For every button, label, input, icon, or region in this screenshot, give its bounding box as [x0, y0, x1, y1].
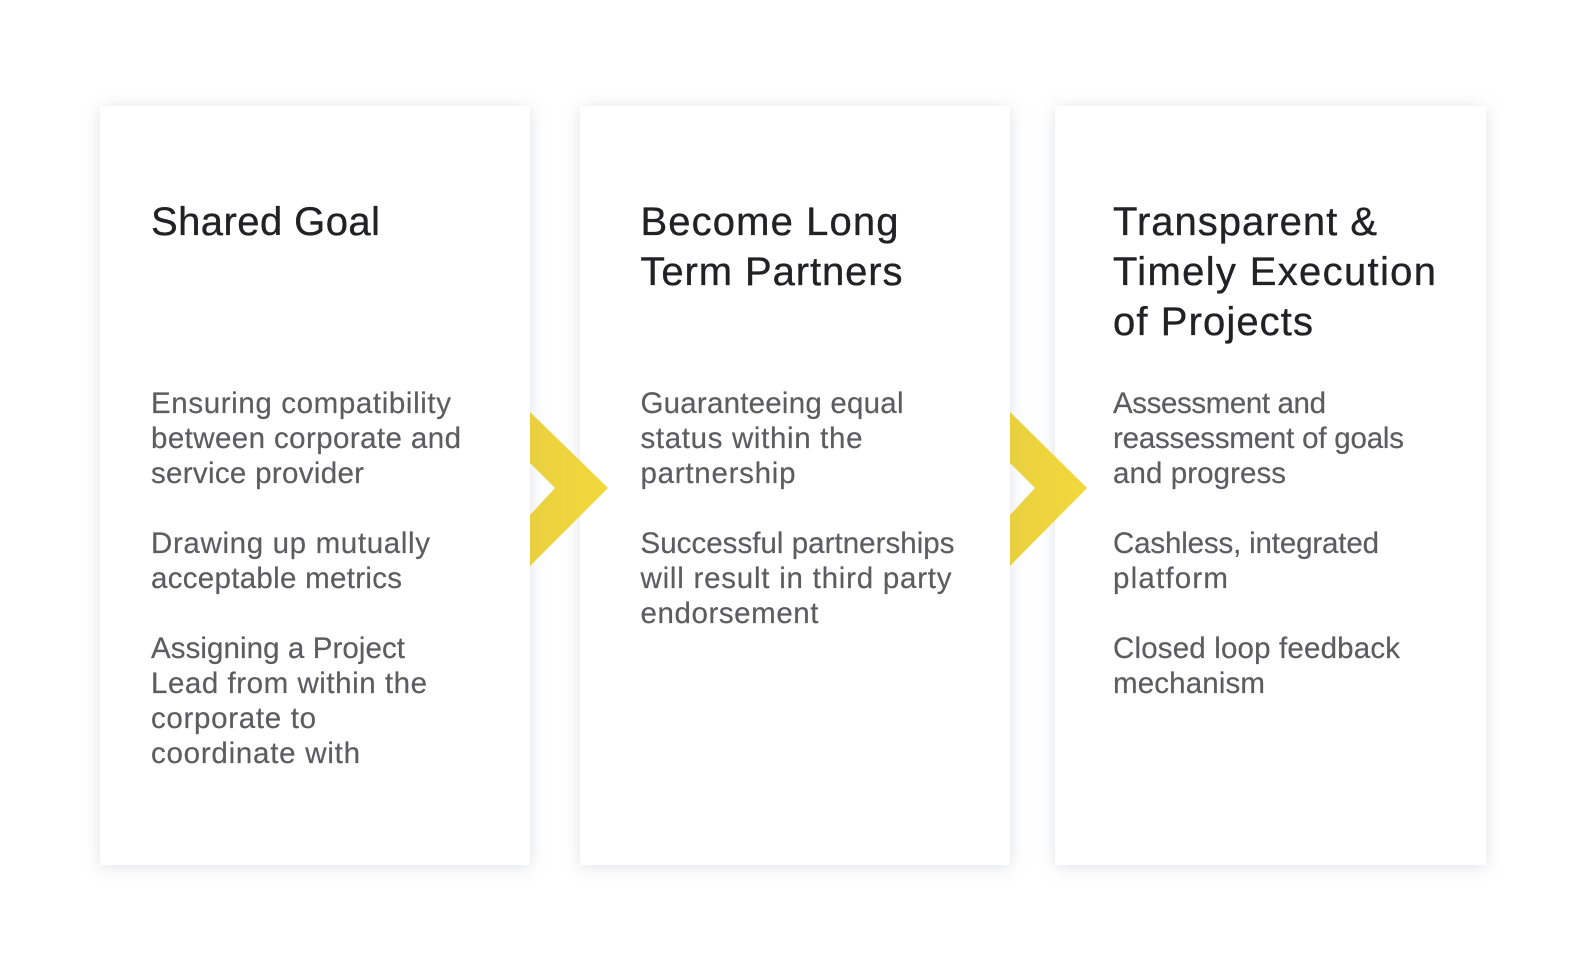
text block: shared goal points: Ensuring compatibility: [151, 387, 451, 420]
text block: execution points: mechanism: [1113, 667, 1265, 700]
heading: become long term partners: Become Long: [640, 200, 898, 244]
text block: execution points: Closed loop feedback: [1113, 632, 1400, 665]
arrow: second chevron: [1010, 412, 1087, 566]
heading: become long term partners: [640, 200, 902, 294]
text block: shared goal points: Drawing up mutually: [151, 527, 430, 560]
text block: shared goal points: acceptable metrics: [151, 562, 402, 595]
text block: execution points: platform: [1113, 562, 1228, 595]
panel: shared goal: [100, 106, 530, 865]
text block: execution points: [1113, 387, 1404, 700]
arrow: first chevron: [530, 412, 608, 566]
text block: partnership points: status within the: [640, 422, 862, 455]
heading: shared goal: Shared Goal: [151, 200, 380, 244]
text block: shared goal points: Lead from within the: [151, 667, 427, 700]
text block: partnership points: endorsement: [640, 597, 818, 630]
text block: execution points: Assessment and: [1113, 387, 1326, 420]
text block: shared goal points: Assigning a Project: [151, 632, 405, 665]
text block: execution points: Cashless, integrated: [1113, 527, 1379, 560]
text block: shared goal points: coordinate with: [151, 737, 360, 770]
text block: shared goal points: between corporate and: [151, 422, 461, 455]
text block: execution points: and progress: [1113, 457, 1286, 490]
text block: partnership points: Successful partnerships: [640, 527, 954, 560]
card background: [1055, 106, 1486, 865]
heading: become long term partners: Term Partners: [640, 250, 902, 294]
card background: [580, 106, 1010, 865]
heading: transparent and timely execution of projects: [1113, 200, 1436, 344]
text block: execution points: reassessment of goals: [1113, 422, 1404, 455]
panel: long term partners: [580, 106, 1010, 865]
text block: partnership points: partnership: [640, 457, 796, 490]
card background: [100, 106, 530, 865]
heading: transparent and timely execution of projects: Transparent &: [1113, 200, 1377, 244]
text block: shared goal points: [151, 387, 461, 770]
text block: shared goal points: corporate to: [151, 702, 316, 735]
text block: partnership points: will result in third party: [640, 562, 952, 595]
heading: transparent and timely execution of projects: of Projects: [1113, 300, 1313, 344]
heading: transparent and timely execution of projects: Timely Execution: [1113, 250, 1436, 294]
text block: partnership points: [640, 387, 954, 630]
text block: shared goal points: service provider: [151, 457, 364, 490]
panel: transparent and timely execution: [1055, 106, 1486, 865]
text block: partnership points: Guaranteeing equal: [640, 387, 904, 420]
